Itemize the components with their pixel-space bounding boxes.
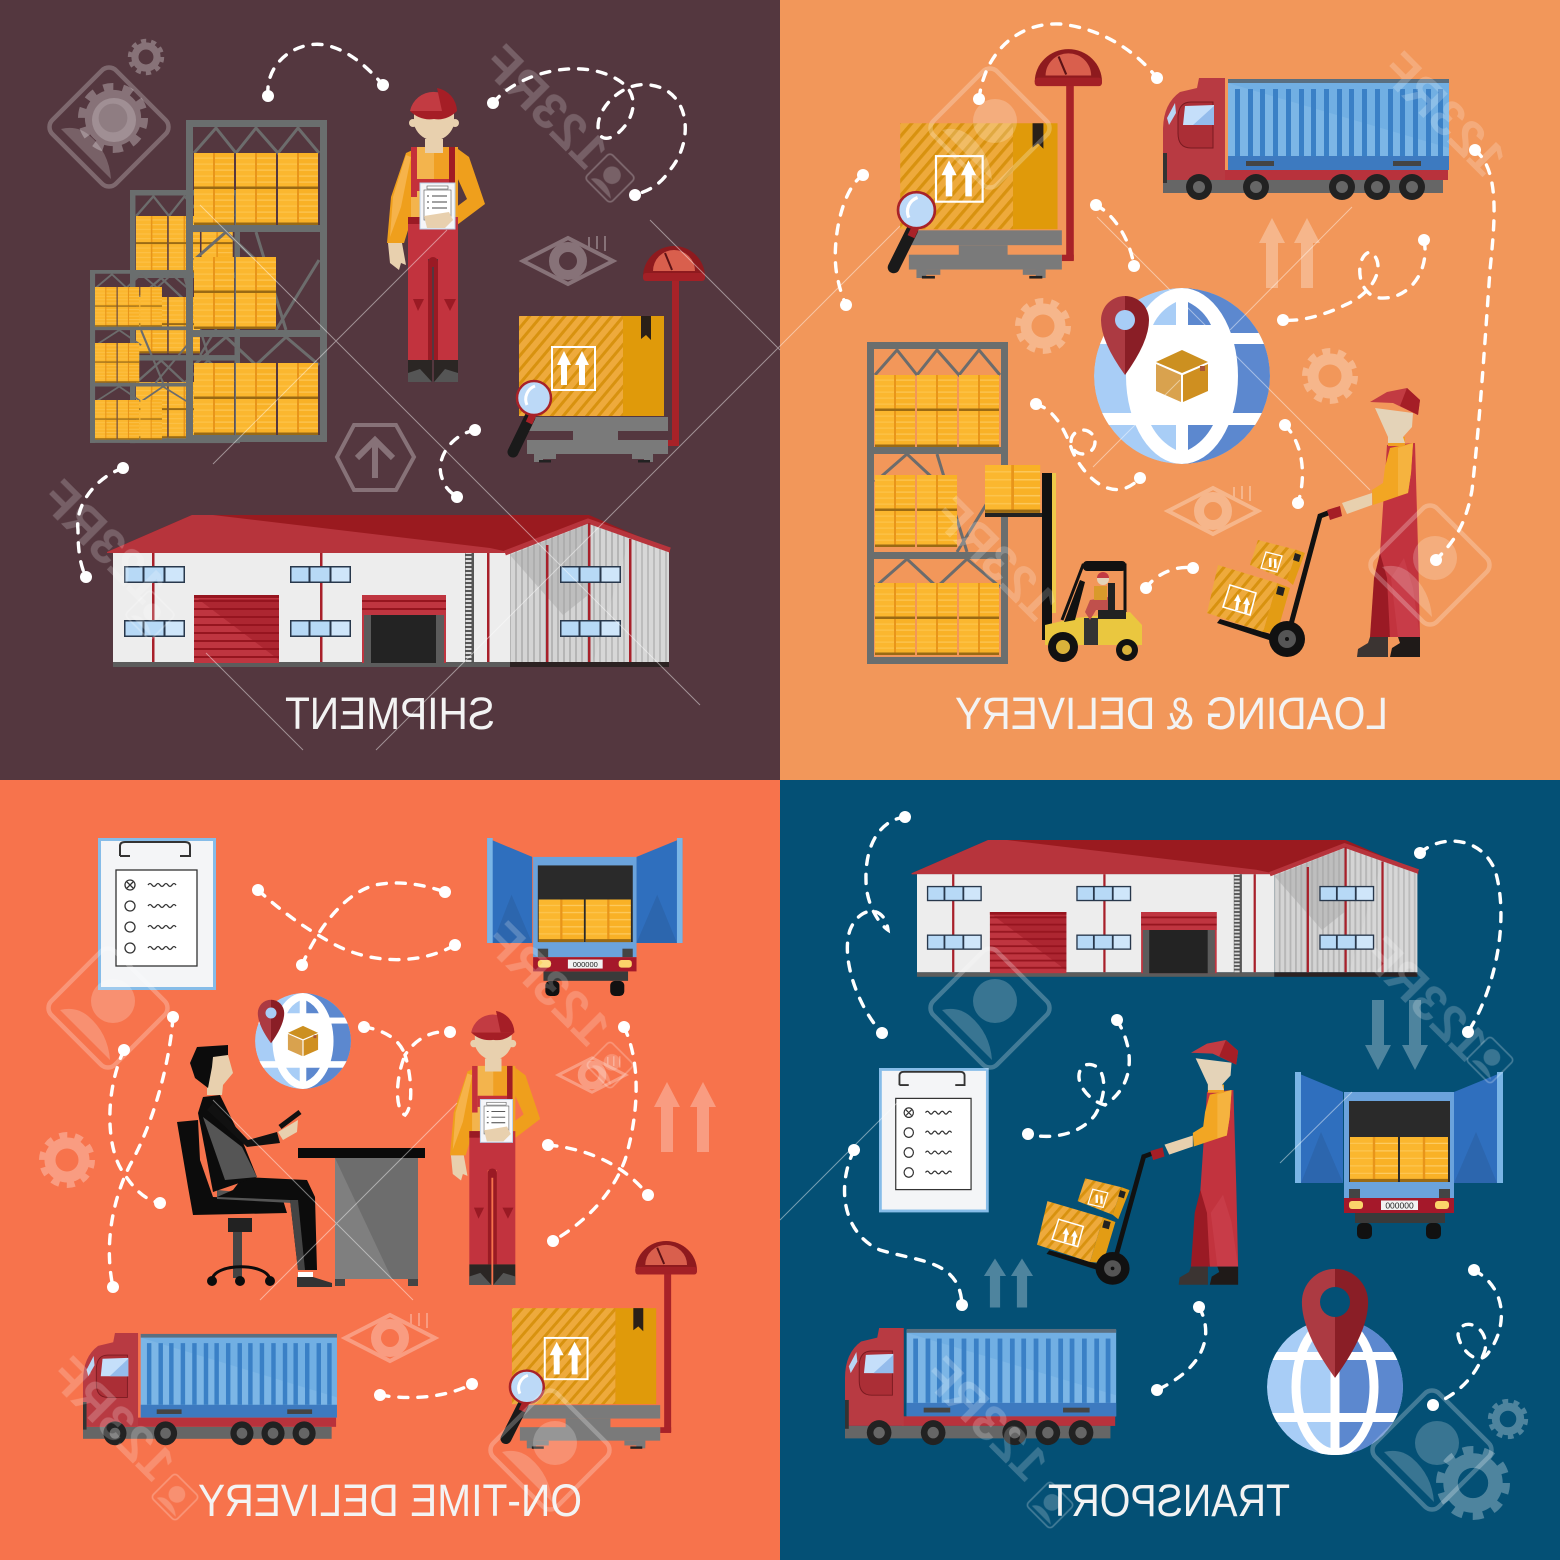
checklist clipboard — [880, 1069, 987, 1211]
panel: transport background — [780, 780, 1560, 1560]
warehouse building — [107, 515, 670, 667]
container truck — [83, 1333, 337, 1445]
box on weighing scale — [513, 246, 705, 462]
chair — [177, 1120, 287, 1286]
man figure — [190, 1045, 332, 1287]
title: loading and delivery: LOADING & DELIVERY — [955, 688, 1388, 739]
overlay: faint watermark wordmarks: 123RF — [475, 911, 621, 1057]
warehouse building — [912, 840, 1418, 977]
worker pushing hand truck — [1207, 388, 1420, 657]
box on weighing scale — [894, 49, 1102, 279]
globe with parcel and map pin — [1092, 288, 1272, 464]
title: on-time delivery: ON-TIME DELIVERY — [198, 1475, 582, 1526]
open rear truck: 000000 — [573, 960, 598, 969]
box on weighing scale — [506, 1241, 697, 1449]
open rear truck — [1295, 1072, 1503, 1239]
panel content: on-time delivery — [83, 838, 697, 1526]
dashed routes — [835, 24, 1494, 594]
desk — [298, 1148, 425, 1286]
dashed routes — [78, 44, 685, 583]
checklist clipboard — [100, 840, 214, 988]
overlay: faint watermark wordmarks: 123RF — [473, 34, 619, 180]
panel: shipment background — [0, 0, 780, 780]
title: shipment: SHIPMENT — [285, 688, 495, 739]
globe with parcel and map pin — [254, 993, 352, 1089]
overlay: faint watermark wordmarks: 123RF — [40, 1346, 186, 1492]
front storage rack — [186, 120, 327, 442]
dashed routes — [107, 883, 654, 1401]
overlay: faint watermark wordmarks: 123RF — [1371, 41, 1517, 187]
panel content: transport — [845, 811, 1503, 1526]
overlay: faint watermark wordmarks: 123RF — [31, 469, 177, 615]
worker pushing hand truck — [1037, 1040, 1238, 1285]
back storage racks — [90, 190, 240, 443]
title: transport: TRANSPORT — [1048, 1475, 1290, 1526]
overlay: faint watermark wordmarks: 123RF — [923, 486, 1069, 632]
container truck — [1163, 78, 1449, 200]
storage rack — [867, 342, 1008, 664]
panel content: loading and delivery — [835, 24, 1494, 739]
panel: on-time delivery background — [0, 780, 780, 1560]
overlay: faint watermark wordmarks: 123RF — [913, 1346, 1059, 1492]
forklift — [985, 465, 1142, 662]
overlay: faint watermark wordmarks: 123RF — [1353, 926, 1499, 1072]
worker with clipboard — [450, 1011, 540, 1285]
worker with clipboard — [387, 88, 485, 382]
globe with large map pin — [1260, 1269, 1410, 1455]
open rear truck: 000000 — [1385, 1200, 1414, 1210]
container truck — [845, 1328, 1116, 1445]
open rear truck — [487, 838, 683, 996]
office manager at desk — [177, 1045, 425, 1287]
dashed routes — [845, 811, 1501, 1411]
panel: loading and delivery background — [780, 0, 1560, 780]
panel content: shipment — [78, 44, 705, 739]
